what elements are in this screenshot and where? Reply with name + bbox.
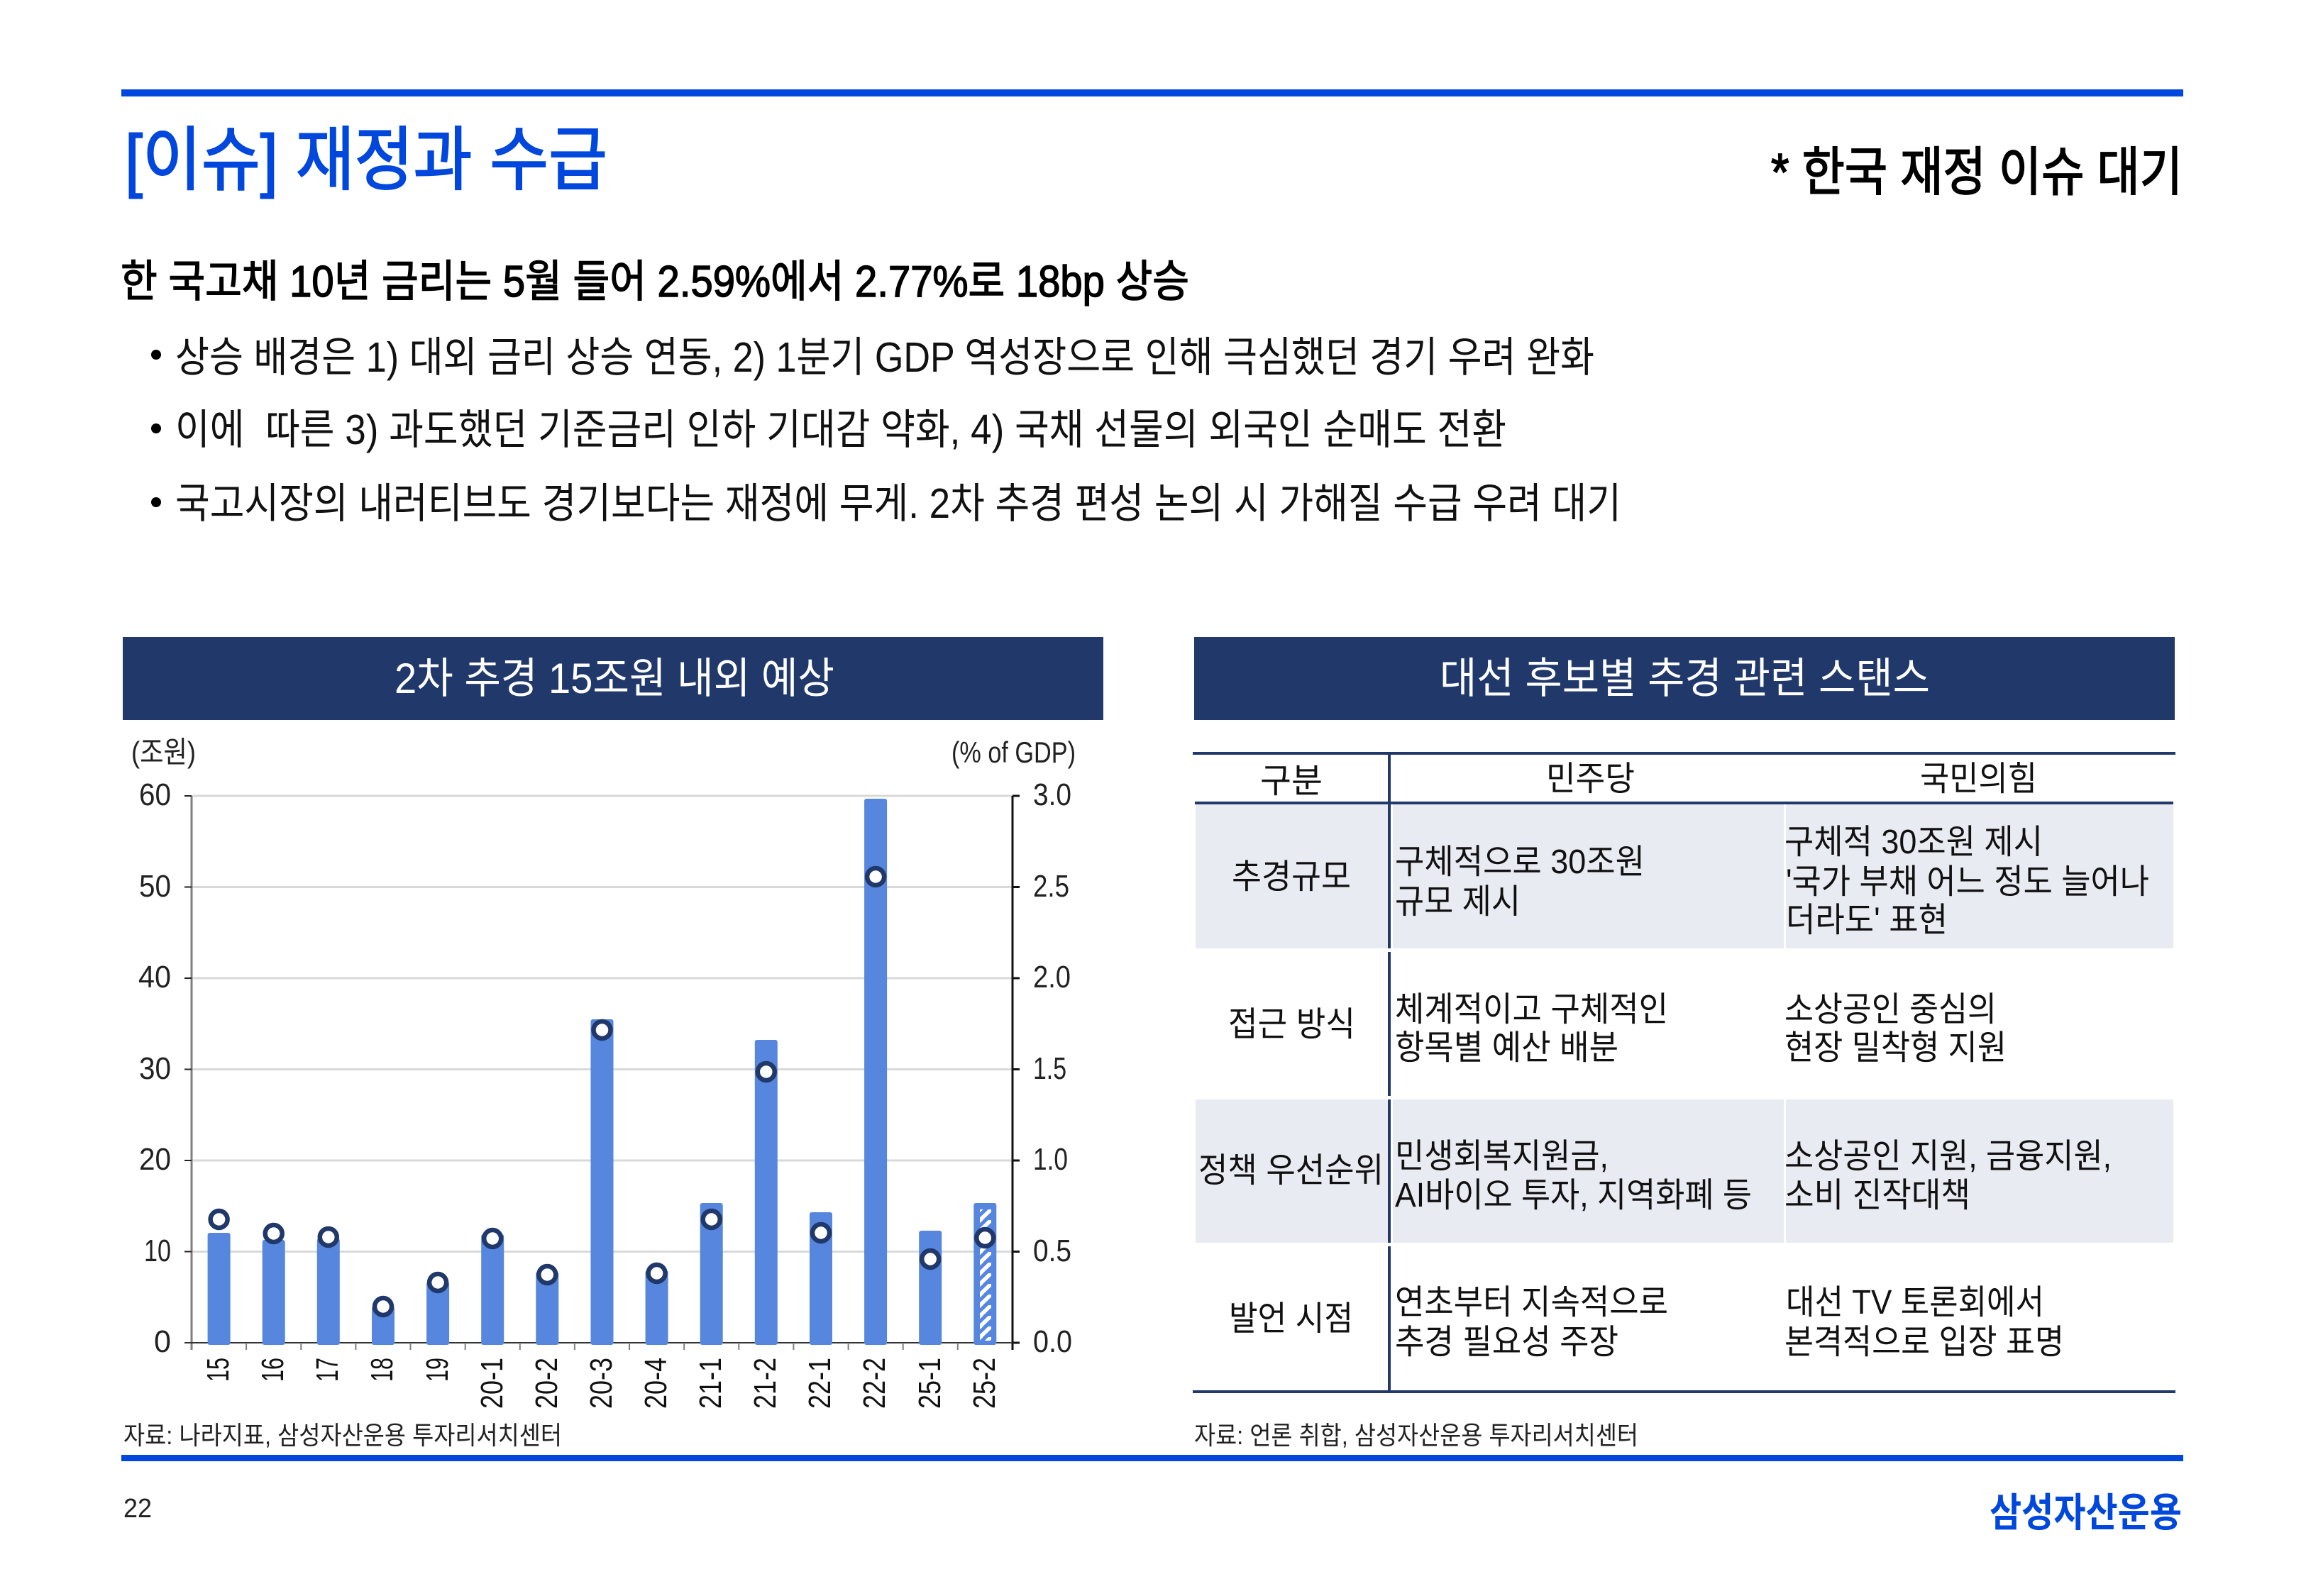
row: approach xyxy=(1228,991,2007,1067)
left axis unit: (조원) xyxy=(131,736,196,769)
category labels: 20-4 xyxy=(639,1358,673,1409)
category labels: 19 xyxy=(420,1358,455,1382)
source note: table: 자료: 언론 취합, 삼성자산운용 투자리서치센터 xyxy=(1194,1421,1638,1450)
right percent axis: 2.0 xyxy=(1033,960,1071,994)
table header row: 민주당 xyxy=(1546,760,1635,798)
bullet 2: 이에 따른 3) 과도했던 기준금리 인하 기대감 약화, 4) 국채 선물의 외국인 순매도 전환 xyxy=(175,406,1506,453)
category labels: 15 xyxy=(201,1358,236,1382)
row: policy priority xyxy=(1198,1138,2112,1214)
category labels xyxy=(201,1358,1002,1409)
category labels: 21-1 xyxy=(693,1358,728,1409)
row: policy priority: 소비 진작대책 xyxy=(1784,1177,1970,1214)
row: timing of remarks: 연초부터 지속적으로 xyxy=(1395,1284,1668,1321)
bars: supplementary budget (trillion won) xyxy=(208,799,996,1345)
right axis unit: (% of GDP) xyxy=(951,736,1076,769)
row: approach: 접근 방식 xyxy=(1228,1006,1355,1043)
row: budget size: 더라도' 표현 xyxy=(1786,902,1948,939)
panel heading: chart xyxy=(123,637,1103,720)
row: budget size: 규모 제시 xyxy=(1395,883,1521,921)
row: policy priority: AI바이오 투자, 지역화폐 등 xyxy=(1395,1177,1752,1214)
row: timing of remarks: 대선 TV 토론회에서 xyxy=(1786,1284,2044,1321)
row: budget size: 구체적 30조원 제시 xyxy=(1784,824,2043,861)
row: timing of remarks: 본격적으로 입장 표명 xyxy=(1784,1324,2064,1361)
category labels: 16 xyxy=(255,1358,290,1382)
category labels: 17 xyxy=(310,1358,345,1382)
row: budget size: 추경규모 xyxy=(1232,858,1351,896)
right percent axis: 1.5 xyxy=(1033,1051,1066,1086)
source note: chart: 자료: 나라지표, 삼성자산운용 투자리서치센터 xyxy=(123,1421,562,1450)
right percent axis: 0.0 xyxy=(1033,1324,1072,1359)
subtitle: Korea fiscal issue waiting: * 한국 재정 이슈 대기 xyxy=(1771,143,2183,201)
panel heading: chart: 2차 추경 15조원 내외 예상 xyxy=(395,655,834,702)
right percent axis: 0.5 xyxy=(1033,1234,1071,1268)
logo wordmark: 삼성자산운용 xyxy=(1990,1490,2182,1535)
row: budget size: '국가 부채 어느 정도 늘어나 xyxy=(1786,863,2149,901)
row: timing of remarks: 추경 필요성 주장 xyxy=(1395,1324,1618,1361)
bullet 1: 상승 배경은 1) 대외 금리 상승 연동, 2) 1분기 GDP 역성장으로 인해 극심했던 경기 우려 완화 xyxy=(175,334,1594,381)
headline: 한 국고채 10년 금리는 5월 들어 2.59%에서 2.77%로 18bp 상승 xyxy=(121,257,1189,306)
right percent axis: 1.0 xyxy=(1033,1142,1068,1177)
row: approach: 체계적이고 구체적인 xyxy=(1395,991,1668,1029)
row: approach: 항목별 예산 배분 xyxy=(1395,1029,1618,1067)
category labels: 20-3 xyxy=(584,1358,619,1409)
panel: supplementary budget chart xyxy=(123,637,1103,1450)
markers: percent of GDP xyxy=(211,868,993,1315)
row: approach: 소상공인 중심의 xyxy=(1784,991,1997,1029)
left value axis: 60 xyxy=(139,777,171,812)
row: budget size xyxy=(1232,824,2149,939)
category labels: 22-1 xyxy=(802,1358,837,1409)
category labels: 25-1 xyxy=(912,1358,947,1409)
left value axis xyxy=(138,777,192,1359)
row: policy priority: 소상공인 지원, 금융지원, xyxy=(1784,1138,2112,1175)
category labels: 18 xyxy=(365,1358,399,1382)
row: budget size: 구체적으로 30조원 xyxy=(1395,843,1645,881)
category axis line and ticks xyxy=(184,1343,1013,1350)
text block: key message xyxy=(121,257,1621,527)
left value axis: 0 xyxy=(154,1324,171,1359)
right percent axis: 3.0 xyxy=(1033,777,1071,812)
row: timing of remarks xyxy=(1229,1284,2064,1361)
row: policy priority: 민생회복지원금, xyxy=(1395,1138,1609,1175)
category labels: 25-2 xyxy=(967,1358,1002,1409)
row: policy priority: 정책 우선순위 xyxy=(1198,1152,1384,1190)
left value axis: 20 xyxy=(139,1142,171,1177)
panel heading: table: 대선 후보별 추경 관련 스탠스 xyxy=(1440,655,1930,702)
left value axis: 10 xyxy=(144,1234,171,1268)
panel: candidate stance table xyxy=(1193,637,2175,1450)
category labels: 20-1 xyxy=(475,1358,509,1409)
right percent axis: 2.5 xyxy=(1033,869,1069,904)
right percent axis xyxy=(1013,777,1072,1359)
bullet 3: 국고시장의 내러티브도 경기보다는 재정에 무게. 2차 추경 편성 논의 시 가해질 수급 우려 대기 xyxy=(175,480,1621,527)
page number: 22 xyxy=(123,1494,152,1524)
table header row: 국민의힘 xyxy=(1920,760,2037,798)
row: approach: 현장 밀착형 지원 xyxy=(1784,1029,2007,1067)
table header row: 구분 xyxy=(1260,763,1323,800)
category labels: 21-2 xyxy=(748,1358,783,1409)
table header row xyxy=(1260,760,2037,800)
category labels: 22-2 xyxy=(857,1358,892,1409)
left value axis: 40 xyxy=(138,960,171,994)
panel heading: table xyxy=(1194,637,2175,720)
left value axis: 50 xyxy=(139,869,171,904)
row: timing of remarks: 발언 시점 xyxy=(1229,1300,1353,1338)
category labels: 20-2 xyxy=(529,1358,564,1409)
title: [이슈] 재정과 수급 xyxy=(125,121,607,199)
left value axis: 30 xyxy=(139,1051,171,1086)
